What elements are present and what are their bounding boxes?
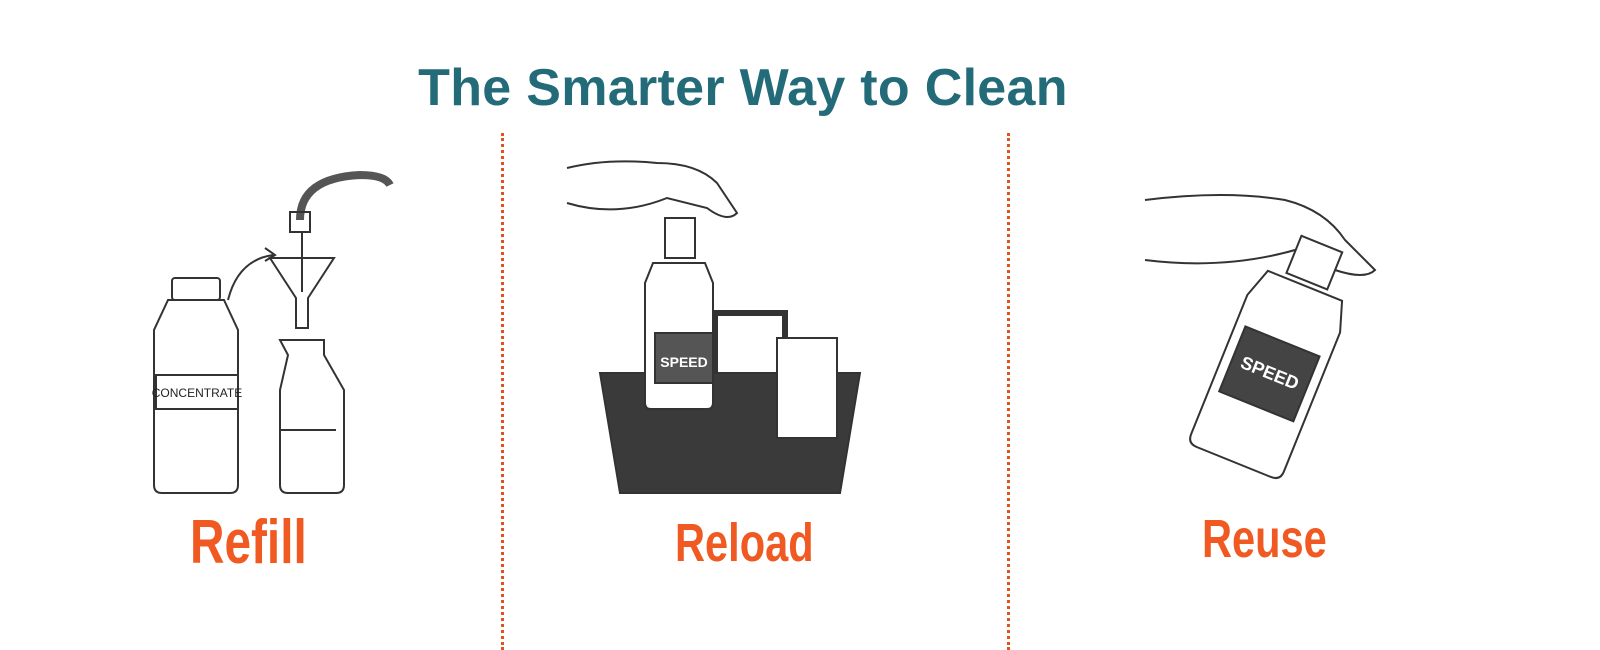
icon: spray bottle: [1187, 225, 1368, 481]
icon: caddy: [600, 313, 860, 493]
panel: reuse illustration: [1144, 194, 1376, 480]
label: Reload: Reload: [675, 513, 814, 573]
label: Refill: Refill: [190, 508, 307, 577]
icon: faucet and funnel: [270, 175, 390, 493]
title: The Smarter Way to Clean: [418, 59, 1068, 117]
icon: spray bottle: SPEED: [1238, 352, 1302, 394]
divider right: [1007, 133, 1010, 650]
panel: refill illustration: [152, 171, 394, 494]
icon: concentrate bottle: [152, 278, 242, 493]
panel: reload illustration: [566, 160, 862, 494]
icon: bottles: [645, 218, 837, 438]
icon: concentrate bottle: CONCENTRATE: [152, 386, 242, 400]
icon: hand: [1145, 195, 1375, 275]
label: Reuse: Reuse: [1202, 509, 1327, 569]
arrow: [228, 248, 275, 300]
divider left: [501, 133, 504, 650]
icon: hand: [567, 161, 737, 217]
icon: bottles: SPEED: [660, 354, 708, 370]
